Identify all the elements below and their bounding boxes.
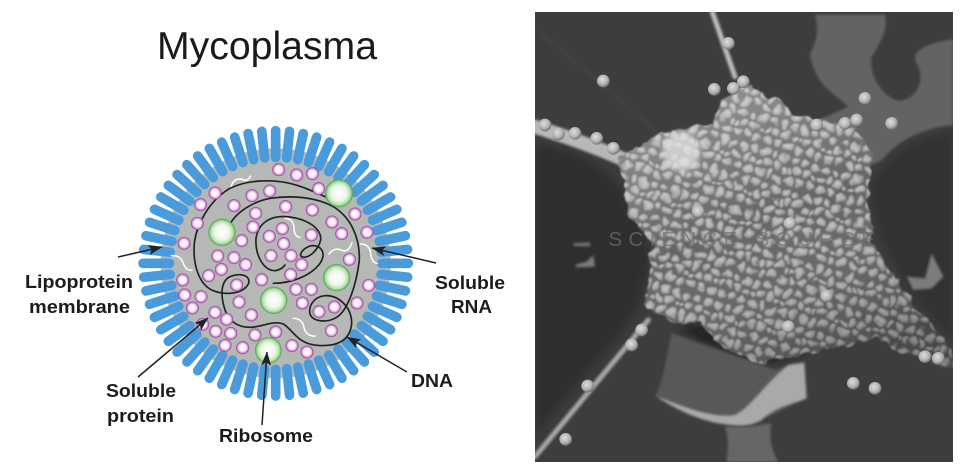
arrow: soluble RNA [372, 248, 436, 263]
diagram: mycoplasma cell [143, 131, 408, 396]
surface blebs [539, 37, 945, 446]
dark shadow regions [535, 132, 953, 437]
label: soluble protein: Soluble [106, 380, 176, 401]
label: soluble protein: protein [107, 405, 174, 426]
bright highlight patch [663, 132, 700, 172]
cytoplasm [161, 148, 391, 378]
fine filaments [535, 12, 735, 457]
label: DNA: DNA [411, 370, 453, 391]
lower membrane bright ridge [657, 363, 807, 426]
label: lipoprotein membrane: Lipoprotein [25, 271, 133, 292]
photo: electron micrograph of mycoplasma [535, 12, 953, 462]
cell body [618, 85, 953, 370]
bottom fragment [725, 423, 778, 462]
label: ribosome: Ribosome [219, 425, 313, 446]
label: lipoprotein membrane: membrane [29, 296, 130, 317]
arrow: DNA [347, 337, 407, 372]
micrograph background [535, 12, 953, 462]
small curled fragments [573, 243, 943, 290]
ribosomes [208, 179, 353, 364]
arrow: lipoprotein membrane [118, 247, 162, 257]
soluble proteins [176, 163, 375, 358]
arrow: soluble protein [138, 318, 208, 377]
DNA strand [194, 181, 359, 346]
label: soluble RNA: RNA [451, 296, 492, 317]
upper-right membrane sheet [810, 15, 953, 167]
watermark: SCIENCE SOURCE [608, 228, 875, 251]
arrow: ribosome [262, 352, 267, 425]
lipoprotein membrane [143, 131, 408, 396]
soluble RNA squiggles [172, 176, 377, 336]
title: Mycoplasma [157, 25, 377, 68]
lower membrane sheet [655, 333, 802, 418]
label: soluble RNA: Soluble [435, 272, 505, 293]
